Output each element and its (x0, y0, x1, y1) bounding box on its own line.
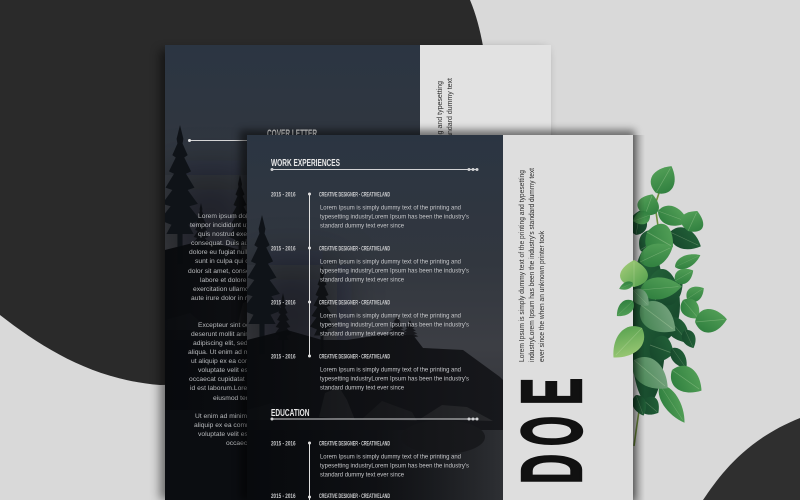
cover letter body text: voluptate velit esse (198, 367, 255, 374)
cover letter body text: consequat. Duis aute irure (191, 240, 269, 247)
cover letter body text: sunt in culpa qui officia (195, 258, 263, 265)
cover letter body text: eiusmod tempor (213, 395, 262, 402)
work experiences rule (270, 168, 478, 171)
work entry 3: CREATIVE DESIGNER - CREATIVELAND (319, 300, 390, 306)
back sheet side text: industryLorem Ipsum has been the industry's standard dummy text (447, 78, 454, 284)
cover letter body text: Ut enim ad minim veniam (195, 413, 271, 420)
cover letter body text: labore et dolore magna (200, 277, 269, 284)
heading: work experiences: WORK EXPERIENCES (271, 158, 340, 169)
education timeline (308, 442, 311, 500)
work entry 2 (271, 246, 470, 284)
cover letter body text: aliquip ex ea commodo (194, 422, 263, 429)
work entry 4: Lorem Ipsum is simply dummy text of the printing and (320, 366, 461, 374)
front sheet shadow (240, 130, 635, 500)
dark foliage (627, 209, 705, 420)
cover letter heading: COVER LETTER (267, 128, 317, 140)
education entry 2: CREATIVE DESIGNER - CREATIVELAND (319, 493, 390, 500)
back sheet: cover letter (160, 45, 551, 500)
work entry 1: Lorem Ipsum is simply dummy text of the printing and (320, 204, 461, 212)
cover letter body text: voluptate velit esse (198, 431, 255, 438)
surname DOE: D (505, 454, 600, 484)
dark blob bottom-right (703, 418, 800, 500)
cover letter body text: ut aliquip ex ea commodo (191, 358, 267, 365)
cover letter body text: quis nostrud exercitation (198, 231, 271, 238)
education entry 2 (271, 493, 390, 500)
surname DOE: O (505, 416, 600, 446)
mid leaves (631, 160, 728, 427)
cover letter body text: Excepteur sint occaecat (198, 322, 269, 329)
cover letter body text: occaecat (226, 440, 253, 447)
cover letter body text: aliqua. Ut enim ad minim (188, 349, 262, 356)
work entry 4: typesetting industryLorem Ipsum has been the industry's (320, 376, 470, 382)
work entry 1: standard dummy text ever since (320, 222, 404, 230)
surname DOE (505, 378, 600, 484)
back sheet light panel (420, 45, 551, 500)
work entry 1: 2015 - 2016 (271, 192, 296, 198)
work entry 2: CREATIVE DESIGNER - CREATIVELAND (319, 246, 390, 252)
back sheet shadow (160, 50, 546, 500)
work entry 4: standard dummy text ever since (320, 384, 404, 392)
cover letter body text: Lorem ipsum dolor sit amet (198, 213, 279, 220)
cover letter body text: tempor incididunt ut labore (190, 222, 269, 229)
shadow right of front sheet (633, 135, 645, 500)
work entry 3 (271, 300, 470, 338)
front sheet: resume (242, 135, 633, 500)
education entry 2: 2015 - 2016 (271, 493, 296, 500)
work entry 4: 2015 - 2016 (271, 354, 296, 360)
cover letter body text: dolor sit amet, consectetur (188, 268, 267, 275)
work entry 1 (271, 192, 470, 230)
work entry 4 (271, 354, 470, 392)
back sheet photo panel (160, 45, 421, 500)
plant behind front sheet (625, 160, 728, 446)
education entry 1: standard dummy text ever since (320, 472, 404, 478)
cover letter body text: exercitation ullamco laboris (193, 286, 274, 293)
heading: education: EDUCATION (271, 408, 310, 419)
resume side text: ever since the when an unknown printer took (539, 231, 546, 362)
education entry 1: typesetting industryLorem Ipsum has been the industry's (320, 462, 470, 470)
work entry 3: 2015 - 2016 (271, 300, 296, 306)
work entry 2: standard dummy text ever since (320, 276, 404, 284)
education entry 1 (271, 440, 470, 478)
work entry 3: standard dummy text ever since (320, 330, 404, 338)
work entry 2: 2015 - 2016 (271, 246, 296, 252)
plant stem (634, 190, 660, 446)
work timeline (308, 192, 311, 358)
back sheet side text (437, 78, 454, 284)
cover letter body text: deserunt mollit anim id est (191, 331, 269, 338)
education entry 1: 2015 - 2016 (271, 440, 296, 448)
resume side text: Lorem Ipsum is simply dummy text of the printing and typesetting (519, 170, 526, 362)
work entry 1: CREATIVE DESIGNER - CREATIVELAND (319, 192, 390, 198)
education entry 1: CREATIVE DESIGNER - CREATIVELAND (319, 440, 390, 448)
resume side text (519, 168, 546, 362)
education entry 1: Lorem Ipsum is simply dummy text of the printing and (320, 454, 461, 460)
dark blob top-left (0, 0, 487, 385)
work entry 2: typesetting industryLorem Ipsum has been the industry's (320, 268, 470, 274)
resume photo panel (242, 135, 503, 500)
pale leaves (625, 285, 684, 398)
resume side text: industryLorem Ipsum has been the industry's standard dummy text (529, 168, 536, 362)
cover letter body text: adipiscing elit, sed do (193, 340, 257, 347)
work entry 2: Lorem Ipsum is simply dummy text of the printing and (320, 258, 461, 266)
work entry 1: typesetting industryLorem Ipsum has been the industry's (320, 214, 470, 220)
front sheet: resume: E (505, 378, 600, 405)
cover letter body text: dolore eu fugiat nulla pariatur (189, 249, 276, 256)
cover letter body text: occaecat cupidatat non (189, 376, 258, 383)
work entry 4: CREATIVE DESIGNER - CREATIVELAND (319, 354, 390, 360)
back sheet side text: Lorem Ipsum is simply dummy text of the printing and typesetting (437, 81, 444, 283)
cover letter rule (188, 135, 420, 142)
cover letter body text: id est laborum.Lorem ipsum (190, 385, 273, 392)
cover letter body text: aute irure dolor in repre (191, 295, 261, 302)
work entry 3: Lorem Ipsum is simply dummy text of the printing and (320, 312, 461, 320)
resume light panel (503, 135, 633, 500)
cover letter body text (188, 213, 279, 447)
work entry 3: typesetting industryLorem Ipsum has been the industry's (320, 322, 470, 328)
education rule (270, 418, 478, 420)
plant leaves over front sheet (605, 260, 651, 366)
